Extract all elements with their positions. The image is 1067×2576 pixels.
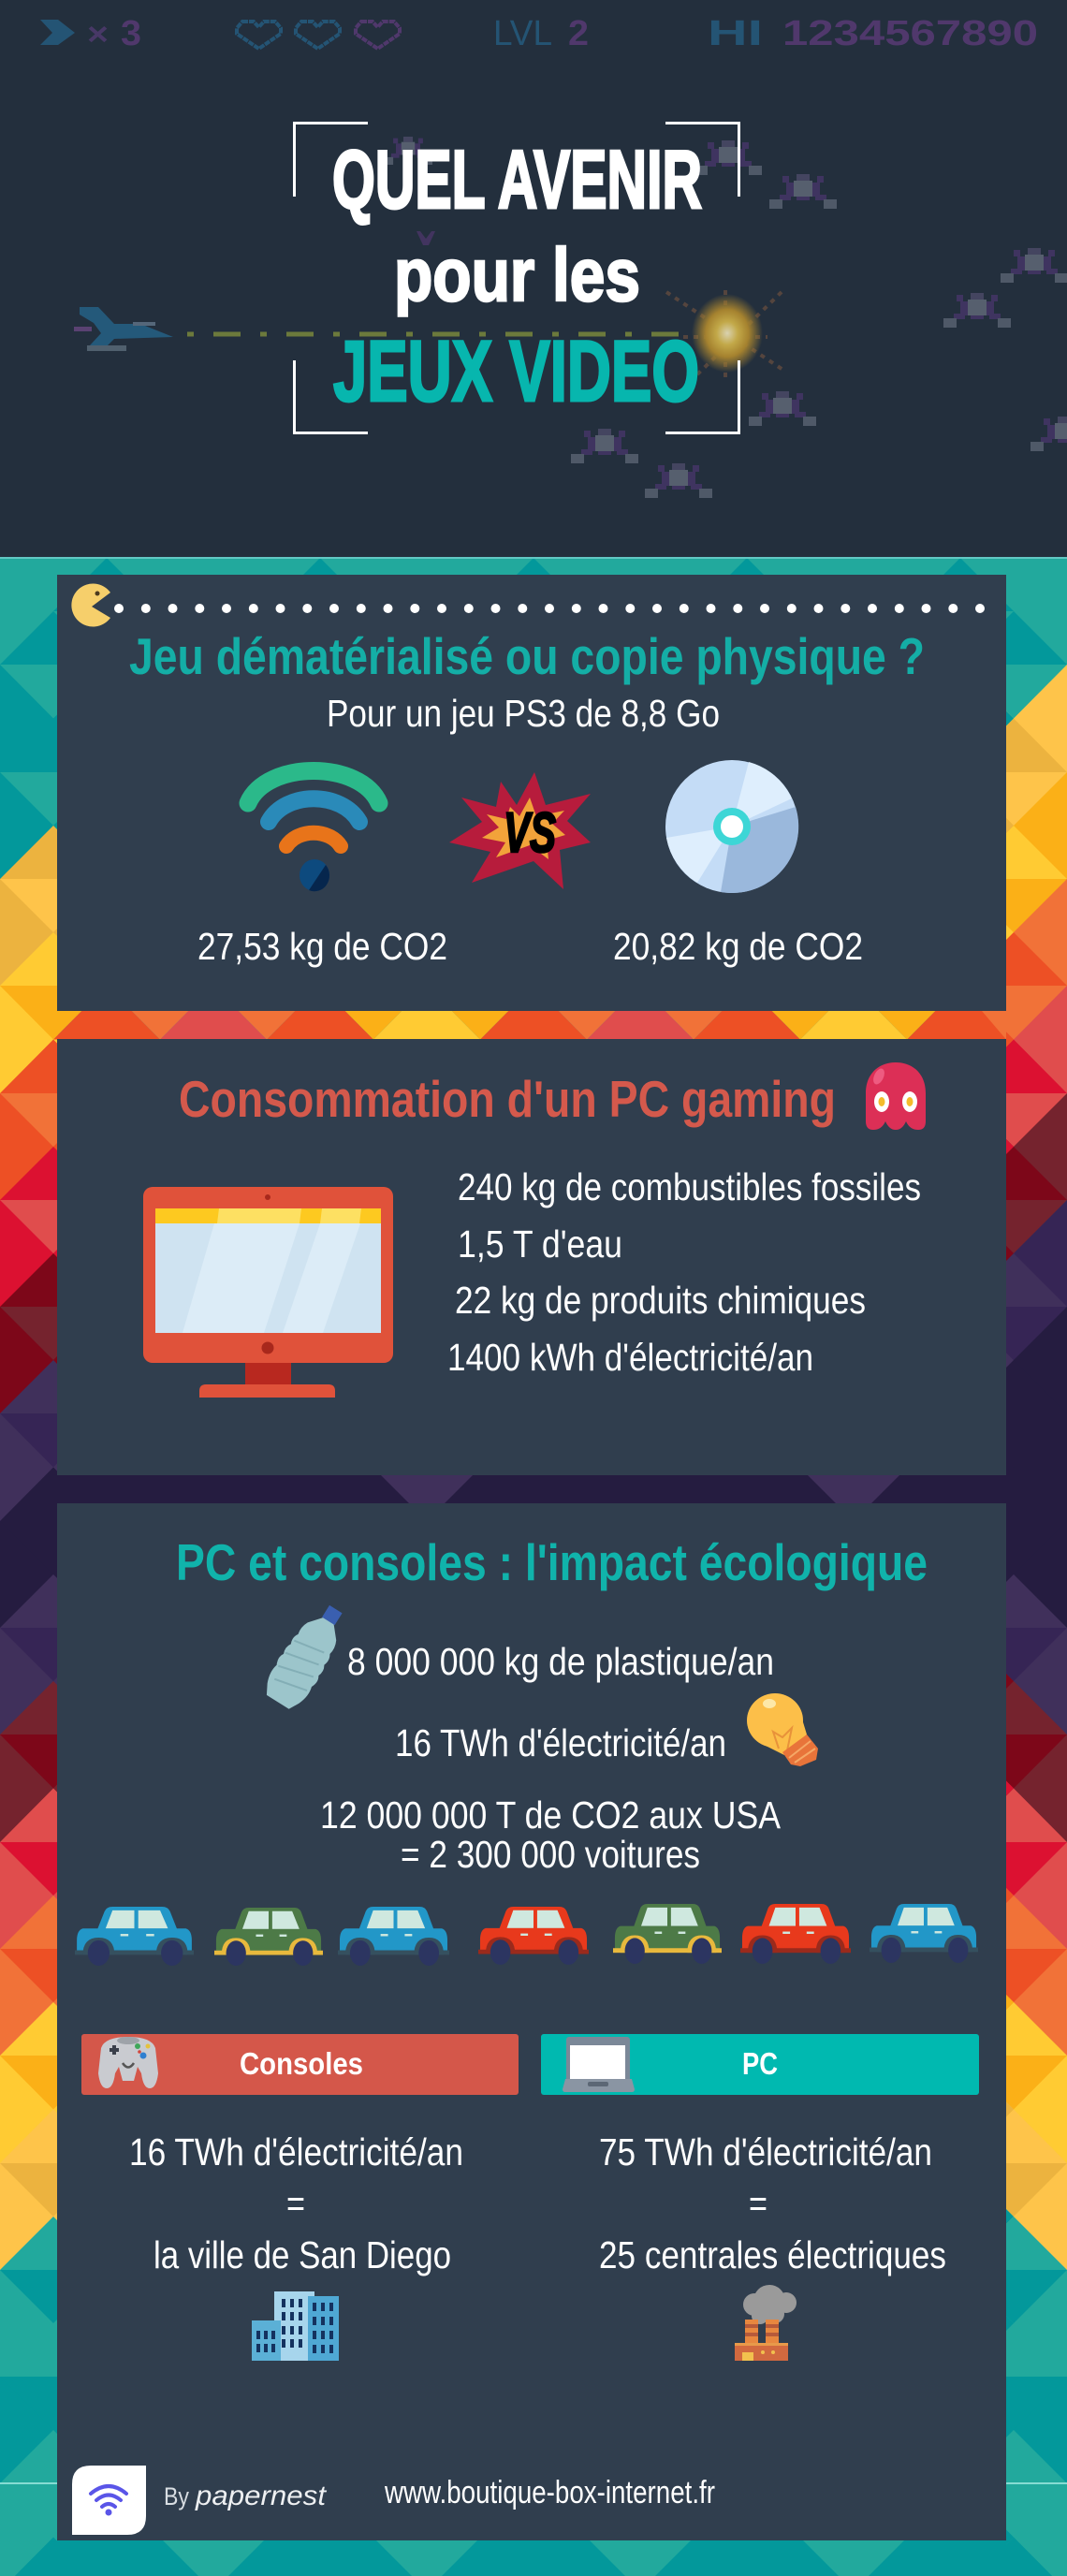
stats list: 1400 kWh d'électricité/an xyxy=(447,1336,813,1379)
stats list: 1,5 T d'eau xyxy=(458,1222,622,1266)
heading: Consommation d'un PC gaming xyxy=(179,1070,836,1128)
explosion xyxy=(666,290,784,379)
HUD: lives: 3 xyxy=(121,14,141,53)
stat: electricity: 16 TWh d'électricité/an xyxy=(395,1721,726,1764)
badge: papernest logo xyxy=(72,2466,146,2535)
hero banner xyxy=(0,0,1067,559)
credit: By papernest: papernest xyxy=(195,2481,328,2511)
HUD: level: LVL xyxy=(493,14,552,53)
stat: CO2: = 2 300 000 voitures xyxy=(401,1833,700,1876)
icon: light bulb xyxy=(747,1693,818,1766)
title frame brackets xyxy=(294,124,739,432)
stat: digital: 27,53 kg de CO2 xyxy=(197,925,447,968)
pacman dots xyxy=(114,604,985,613)
HUD: high score: 1234567890 xyxy=(782,14,1038,53)
HUD: level: 2 xyxy=(568,14,589,53)
header bar: PC: PC xyxy=(742,2046,778,2081)
column: PC: 75 TWh d'électricité/an xyxy=(599,2130,932,2174)
icon: laptop xyxy=(563,2037,635,2092)
icon: disc xyxy=(665,760,798,893)
column: consoles: la ville de San Diego xyxy=(153,2233,451,2276)
column: PC: = xyxy=(749,2182,767,2225)
pixel spaceship xyxy=(74,307,173,351)
column: consoles: 16 TWh d'électricité/an xyxy=(129,2130,463,2174)
HUD: hearts xyxy=(237,22,400,49)
background: triangle pattern xyxy=(0,558,1067,2576)
HUD: lives: × xyxy=(87,17,109,52)
row of cars xyxy=(75,1904,978,1966)
icon: plastic bottle xyxy=(258,1597,355,1714)
icon: wifi purple xyxy=(91,2486,126,2514)
header bar: PC xyxy=(541,2034,979,2095)
title: QUEL AVENIR xyxy=(332,133,702,226)
website url: www.boutique-box-internet.fr xyxy=(384,2475,715,2510)
stats list xyxy=(447,1165,921,1379)
laser beam xyxy=(187,331,688,337)
HUD: high score: HI xyxy=(708,14,763,53)
stat: physical: 20,82 kg de CO2 xyxy=(613,925,863,968)
title: pour les xyxy=(394,233,640,316)
icon: game controller xyxy=(98,2037,158,2088)
column: PC xyxy=(599,2130,946,2276)
stats list: 240 kg de combustibles fossiles xyxy=(458,1165,921,1208)
panel: digital vs physical xyxy=(57,575,1006,1011)
heading: PC et consoles : l'impact écologique xyxy=(176,1533,928,1591)
stat: plastic: 8 000 000 kg de plastique/an xyxy=(347,1640,774,1683)
stat: CO2 xyxy=(320,1793,781,1876)
panel: gaming PC consumption xyxy=(57,1039,1006,1475)
space invaders xyxy=(384,137,1067,498)
panel: ecological impact xyxy=(57,1503,1006,2540)
icon: pacman xyxy=(71,583,110,627)
icon: monitor xyxy=(143,1187,393,1398)
HUD: level xyxy=(493,14,589,53)
heading: Jeu dématérialisé ou copie physique ? xyxy=(129,627,925,685)
header bar: consoles: Consoles xyxy=(240,2046,363,2081)
icon: versus burst xyxy=(449,772,591,889)
HUD: high score xyxy=(708,14,1038,53)
icon: power plant xyxy=(735,2285,797,2361)
title xyxy=(332,133,702,419)
icon: wifi xyxy=(248,771,379,891)
header bar: consoles xyxy=(81,2034,519,2095)
HUD: lives xyxy=(40,14,141,53)
icon: ghost xyxy=(866,1062,926,1130)
stats list: 22 kg de produits chimiques xyxy=(455,1279,866,1322)
title: JEUX VIDEO xyxy=(333,324,699,419)
icon: city buildings xyxy=(252,2291,339,2361)
column: consoles: = xyxy=(286,2182,305,2225)
icon: versus burst: VS xyxy=(504,801,556,864)
stat: CO2: 12 000 000 T de CO2 aux USA xyxy=(320,1793,781,1837)
column: consoles xyxy=(129,2130,463,2276)
column: PC: 25 centrales électriques xyxy=(599,2233,946,2276)
subheading: Pour un jeu PS3 de 8,8 Go xyxy=(327,692,720,735)
credit: By papernest: By xyxy=(164,2482,189,2510)
